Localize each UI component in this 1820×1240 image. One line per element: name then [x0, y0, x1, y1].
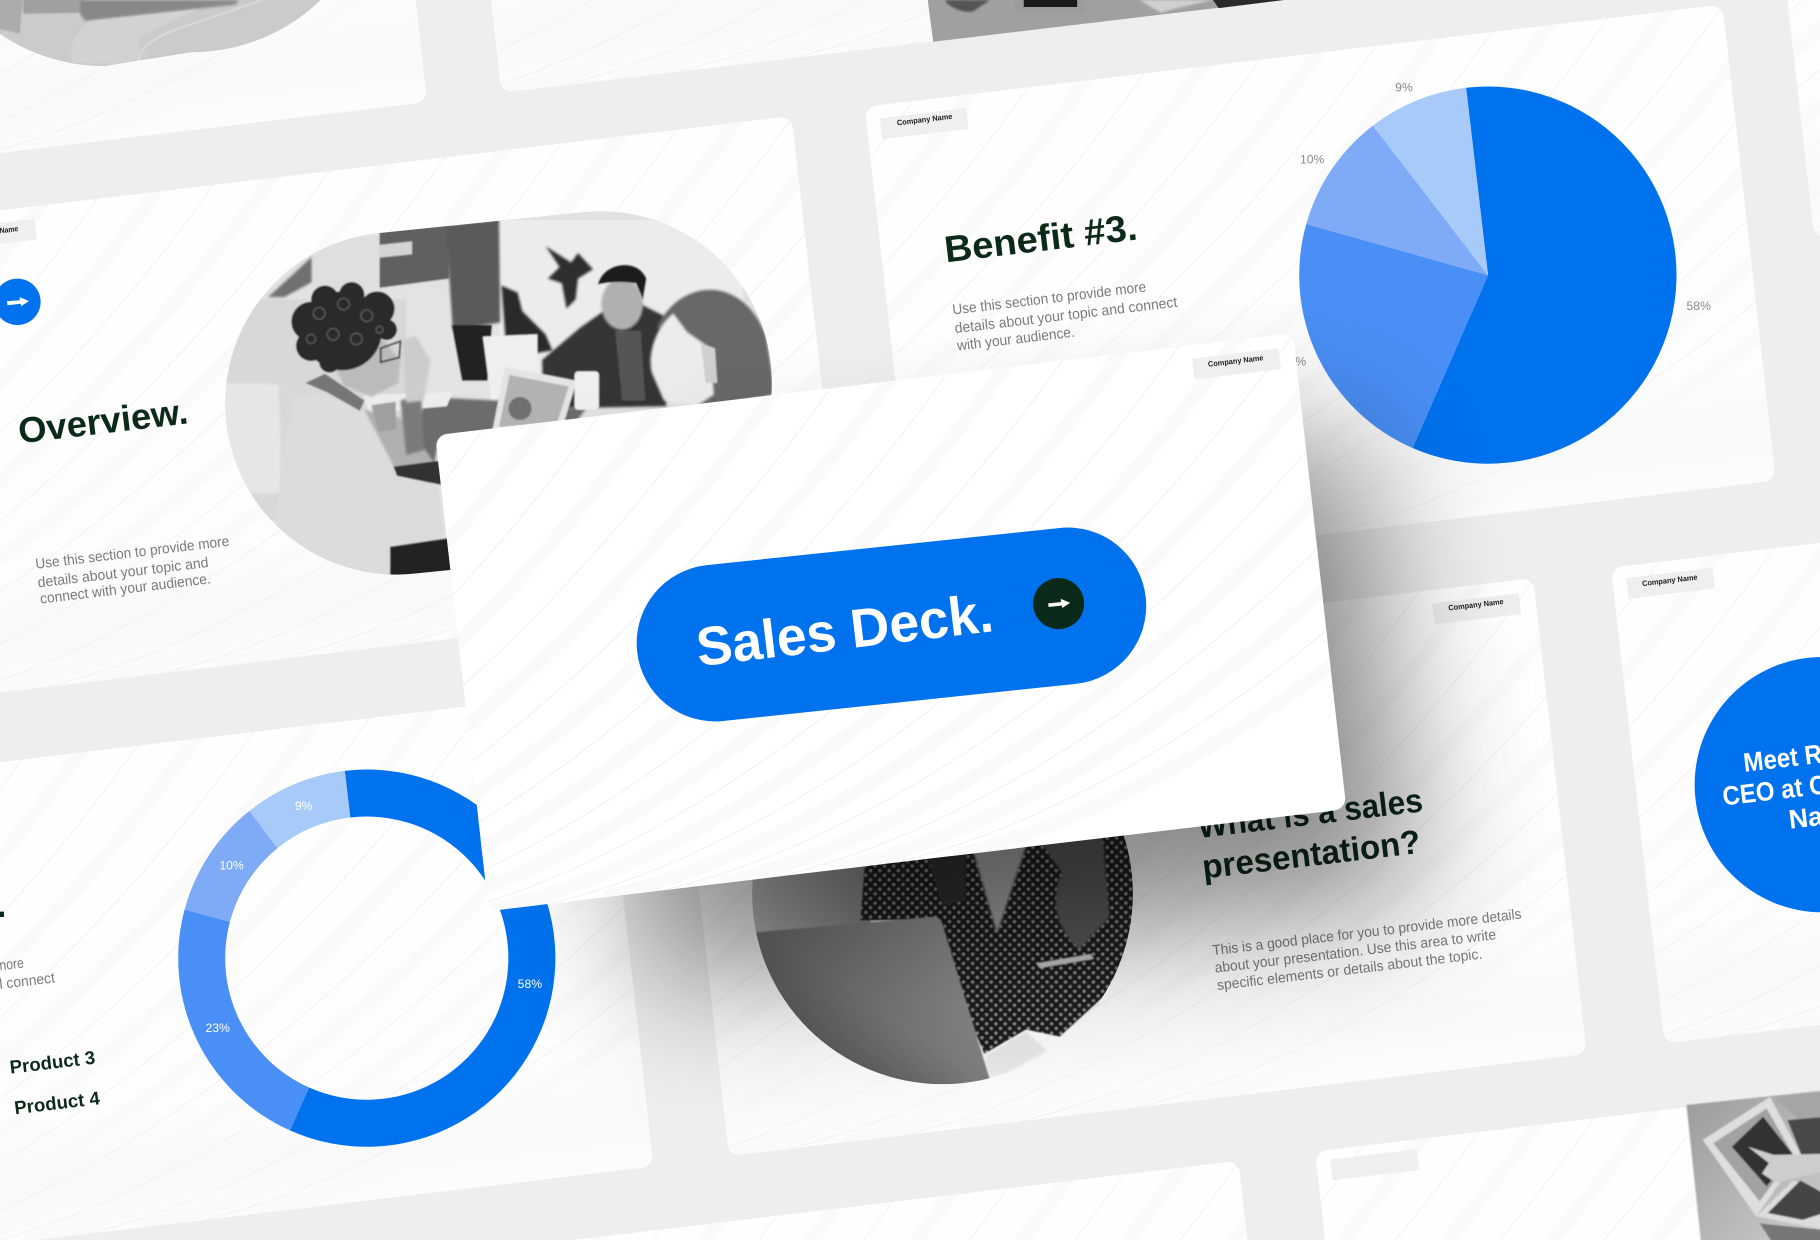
- chart labels: donut percentages: 23%: [205, 1021, 230, 1035]
- legend: products: Product 3: [8, 1047, 96, 1078]
- chart: donut chart: [178, 770, 555, 1147]
- tag: company name: Company Name: [896, 112, 953, 127]
- text block: overview description: [35, 534, 230, 608]
- icon group: curly hair: [291, 282, 397, 373]
- panel: Overview slide: [0, 118, 822, 692]
- text block: benefit description: with your audience.: [955, 325, 1076, 355]
- shadow: cast by centre slide: [604, 432, 1418, 987]
- legend: products: [8, 1047, 102, 1118]
- tag: company name: [880, 108, 969, 139]
- photo: laptop from above: [1687, 1090, 1820, 1240]
- text block: overview description: connect with your audience.: [39, 571, 212, 608]
- photo: woman with laptop: [752, 836, 1133, 1084]
- panel: donut chart slide: [0, 706, 652, 1240]
- text block: presentation description: [1212, 907, 1522, 994]
- tag: company name: [1192, 348, 1281, 379]
- text block: presentation description: specific elements or details about the topic.: [1216, 947, 1483, 994]
- heading: what is a sales presentation: [1196, 782, 1425, 887]
- panel: top-centre slide with photo: [491, 0, 1284, 92]
- panel: top-right edge slide: [1788, 0, 1820, 236]
- heading: what is a sales presentation: presentation?: [1200, 824, 1422, 887]
- title pill: Sales Deck: Sales Deck.: [693, 582, 996, 678]
- icon: dark arrow button: [1033, 578, 1084, 629]
- photo: meeting around a table: [225, 211, 772, 575]
- panel: bottom-right slide with laptop photo: [1316, 1090, 1820, 1240]
- text block: presentation description: This is a good place for you to provide more details: [1212, 907, 1522, 959]
- chart labels: pie percentages: 9%: [1395, 81, 1413, 95]
- text block: overview description: details about your topic and: [37, 555, 209, 591]
- text block: benefit description: [952, 280, 1178, 355]
- panel: meet the CEO slide: [1612, 543, 1820, 1042]
- text block: clipped description: [0, 956, 56, 993]
- panel: bottom-centre slide: [575, 1162, 1248, 1240]
- text block: overview description: Use this section to provide more: [35, 534, 230, 573]
- tag: company name: Company Name: [1207, 353, 1264, 369]
- text block: benefit description: details about your topic and connect: [954, 295, 1178, 337]
- text block: benefit description: Use this section to provide more: [952, 280, 1147, 319]
- chart: pie chart: [1299, 86, 1677, 464]
- chart labels: pie percentages: %: [1295, 355, 1306, 369]
- heading: Overview: Overview.: [16, 390, 190, 451]
- panel: top-left slide with sofa photo: [0, 0, 426, 153]
- chart labels: donut percentages: [205, 799, 542, 1035]
- panel: what is a sales presentation slide: [700, 580, 1586, 1155]
- legend: products: Product 4: [13, 1087, 102, 1118]
- chart labels: donut percentages: 9%: [295, 799, 313, 813]
- chart labels: pie percentages: [1295, 81, 1711, 369]
- tag: company name: [1626, 568, 1715, 599]
- tag: company name: Company Name: [1642, 573, 1698, 588]
- callout: blue circle with CEO name: [1695, 657, 1820, 912]
- text block: presentation description: about your presentation. Use this area to write: [1214, 927, 1497, 977]
- tag: empty company name: [1330, 1149, 1419, 1180]
- chart labels: donut percentages: 10%: [219, 858, 244, 872]
- tag: company name: Company Name: [1448, 597, 1504, 613]
- chart labels: pie percentages: 58%: [1687, 299, 1711, 313]
- icon: blue arrow button: [0, 279, 41, 325]
- panel: Benefit #3 slide: [866, 6, 1774, 535]
- heading: what is a sales presentation: What is a sales: [1196, 782, 1425, 846]
- tag: company name: [0, 219, 37, 254]
- panel: Sales Deck centre slide: [436, 335, 1346, 910]
- text block: clipped description: l connect: [0, 970, 56, 993]
- photo: hands with tablet: [927, 0, 1291, 42]
- chart labels: donut percentages: 58%: [518, 977, 542, 991]
- chart labels: pie percentages: 10%: [1300, 153, 1325, 167]
- tag: company name: [1432, 593, 1521, 624]
- photo: sofa: [0, 0, 320, 66]
- heading: Benefit #3: Benefit #3.: [942, 206, 1139, 270]
